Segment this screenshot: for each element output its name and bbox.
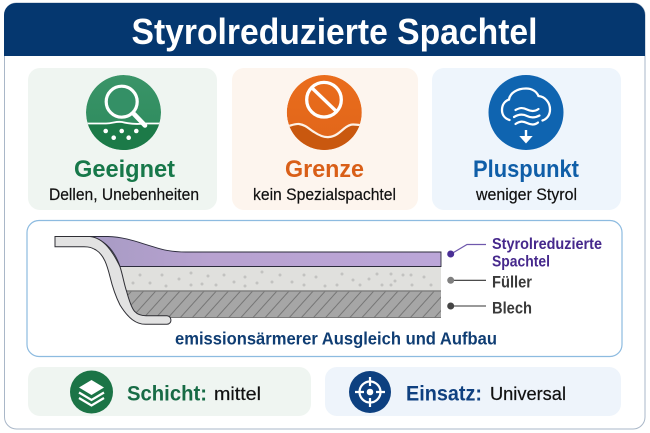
layer: Styrolreduzierte Spachtel [88,236,441,266]
icon: layers [70,370,113,414]
callout: Blech: Blech [492,300,532,318]
heading: Pluspunkt: Pluspunkt [473,156,579,183]
panel: Geeignet [28,68,217,210]
callout: Blech [447,300,532,318]
icon: magnifier over surface [86,75,161,151]
heading: Grenze: Grenze [285,156,364,183]
text: Universal: Universal [490,383,566,404]
heading: Geeignet: Geeignet [74,156,175,183]
callout: Styrolreduzierte Spachtel: Styrolreduzierte [492,236,602,253]
panel: Pluspunkt [432,68,621,210]
layer: Füller [118,266,441,291]
bent sheet metal [55,236,171,324]
text: Einsatz: Einsatz: [406,381,482,405]
panel: Einsatz [325,367,621,416]
text: weniger Styrol: weniger Styrol [475,186,577,204]
layer: Blech [124,291,441,318]
text: kein Spezialspachtel: kein Spezialspachtel [253,186,396,204]
icon: prohibited sign over wave [286,75,362,150]
callout: Styrolreduzierte Spachtel [447,236,602,270]
caption: emissionsärmerer Ausgleich und Aufbau [175,328,497,348]
panel: Schicht [28,367,311,416]
header band [4,3,645,56]
title: Styrolreduzierte Spachtel [132,11,538,52]
callout: Füller [447,273,533,291]
callout: Styrolreduzierte Spachtel: Spachtel [492,254,550,270]
panel: Grenze [232,68,418,210]
text: mittel: mittel [214,383,261,404]
icon: target [349,371,391,413]
icon: cloud with waves and down arrow [488,75,564,150]
text: Dellen, Unebenheiten: Dellen, Unebenheiten [49,186,199,204]
panel: layer diagram [27,220,622,356]
callout: Füller: Füller [492,273,533,291]
text: Schicht: Schicht: [127,381,207,405]
